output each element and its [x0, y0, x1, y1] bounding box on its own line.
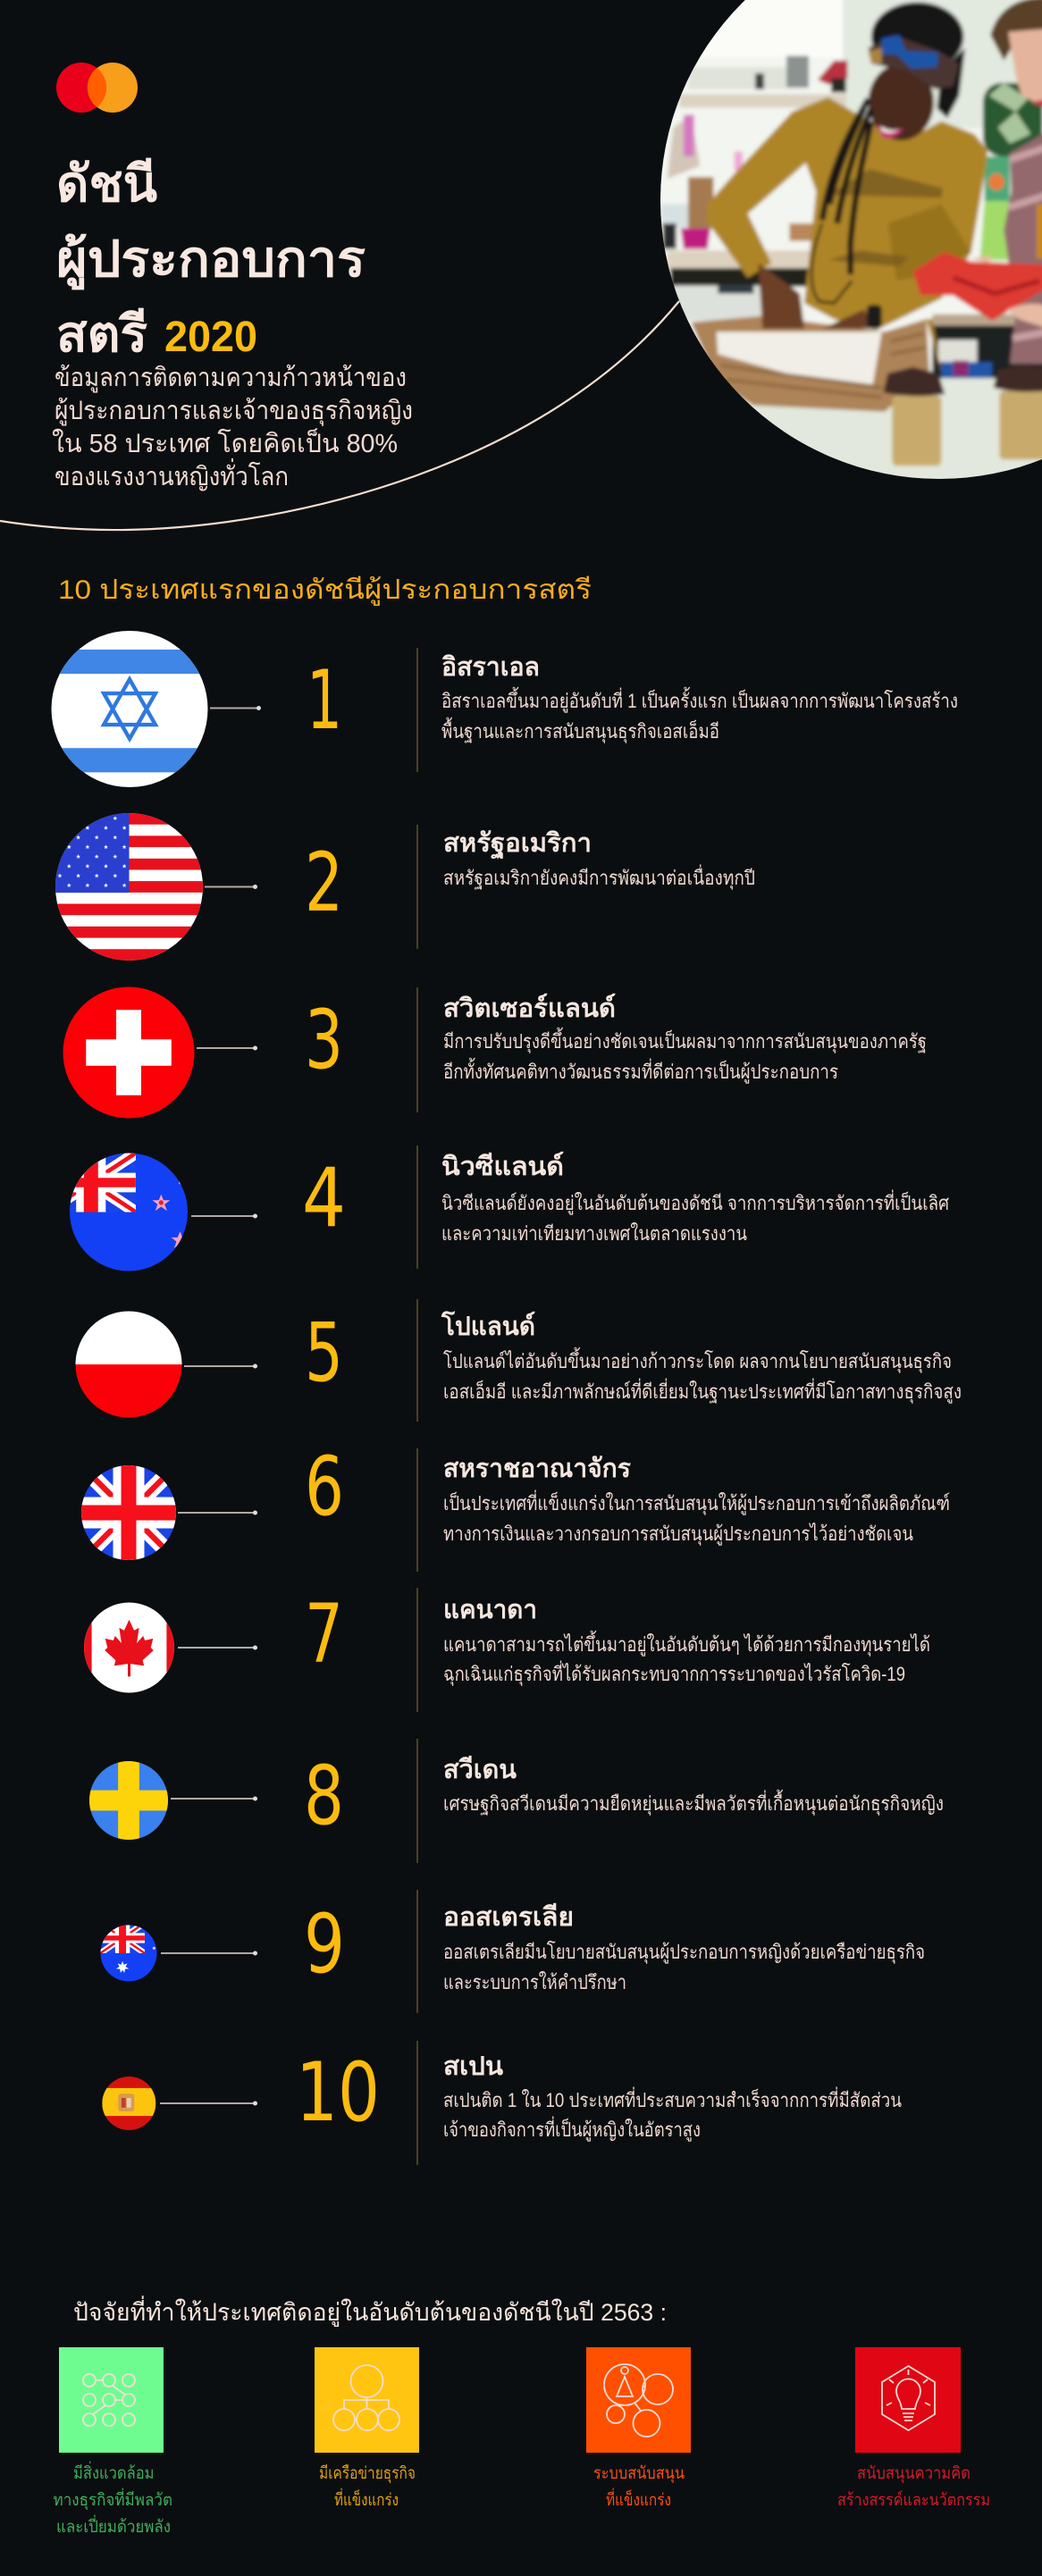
logo: overlapping circles [56, 63, 138, 113]
flag: Canada [84, 1603, 174, 1692]
flag: United Kingdom [81, 1465, 176, 1560]
description [443, 1347, 962, 1404]
flag: Israel [52, 631, 207, 787]
title [56, 155, 366, 362]
flag: United States [55, 813, 203, 961]
caption: ทางธุรกิจที่มีพลวัต [54, 2488, 172, 2511]
caption: มีสิ่งแวดล้อม [73, 2461, 154, 2483]
title: 2020 [164, 314, 257, 361]
connector [171, 1796, 257, 1801]
photo: women packing a box [660, 0, 1042, 479]
description: แคนาดาสามารถไต่ขึ้นมาอยู่ในอันดับต้นๆ ได้ด้วยการมีกองทุนรายได้ [443, 1631, 930, 1657]
icon: green network grid [59, 2347, 164, 2453]
rank number 5: 5 [305, 1306, 343, 1400]
description: ออสเตรเลียมีนโยบายสนับสนุนผู้ประกอบการหญิงด้วยเครือข่ายธุรกิจ [443, 1941, 925, 1964]
description [441, 1189, 949, 1245]
factor 2 [315, 2347, 419, 2510]
rank number 6: 6 [305, 1440, 344, 1534]
description: ทางการเงินและวางกรอบการสนับสนุนผู้ประกอบการไว้อย่างชัดเจน [443, 1523, 913, 1546]
row 4: New Zealand [46, 1145, 949, 1271]
connector [184, 1364, 257, 1369]
icon: yellow hierarchy [315, 2347, 419, 2453]
rank number 3: 3 [305, 994, 343, 1087]
description [443, 1028, 927, 1084]
description: ฉุกเฉินแก่ธุรกิจที่ได้รับผลกระทบจากการระบาดของไวรัสโควิด-19 [443, 1660, 905, 1686]
flag: Poland [75, 1312, 182, 1417]
caption: มีเครือข่ายธุรกิจ [319, 2463, 416, 2484]
country name: สวีเดน [443, 1756, 517, 1784]
country name: สเปน [443, 2052, 503, 2081]
icon: red light bulb [855, 2347, 961, 2453]
title: ผู้ประกอบการ [56, 231, 366, 290]
rank number 9: 9 [304, 1898, 345, 1992]
description: นิวซีแลนด์ยังคงอยู่ในอันดับต้นของดัชนี จากการบริหารจัดการที่เป็นเลิศ [441, 1189, 949, 1215]
description: อิสราเอลขึ้นมาอยู่อันดับที่ 1 เป็นครั้งแรก เป็นผลจากการพัฒนาโครงสร้าง [441, 687, 958, 713]
factor 4 [837, 2347, 990, 2510]
country name: ออสเตรเลีย [443, 1903, 574, 1932]
factor 3 [586, 2347, 691, 2510]
description: สเปนติด 1 ใน 10 ประเทศที่ประสบความสำเร็จจากการที่มีสัดส่วน [443, 2086, 902, 2111]
subtitle text block: ใน 58 ประเทศ โดยคิดเป็น 80% [52, 427, 398, 458]
title: สตรี [56, 306, 147, 362]
icon: orange support network [586, 2347, 691, 2453]
country name: อิสราเอล [441, 653, 540, 682]
caption: ระบบสนับสนุน [593, 2464, 685, 2484]
caption: และเปี่ยมด้วยพลัง [56, 2514, 171, 2537]
connector [197, 1045, 257, 1051]
connector [191, 1213, 257, 1219]
rank number 2: 2 [305, 836, 343, 930]
subtitle text block [52, 364, 413, 491]
row 6: United Kingdom [81, 1440, 950, 1572]
caption: ที่แข็งแกร่ง [334, 2488, 399, 2510]
flag: Australia [100, 1923, 157, 1982]
flag: Switzerland [63, 986, 195, 1119]
row 7: Canada [84, 1588, 930, 1712]
caption [54, 2461, 172, 2537]
description: เจ้าของกิจการที่เป็นผู้หญิงในอัตราสูง [443, 2116, 701, 2142]
row 8: Sweden [89, 1739, 944, 1863]
subtitle text block: ผู้ประกอบการและเจ้าของธุรกิจหญิง [55, 397, 413, 426]
country name: โปแลนด์ [441, 1310, 535, 1341]
flag: Spain [102, 2077, 155, 2130]
description: โปแลนด์ไต่อันดับขึ้นมาอย่างก้าวกระโดด ผลจากนโยบายสนับสนุนธุรกิจ [443, 1347, 952, 1373]
description: พื้นฐานและการสนับสนุนธุรกิจเอสเอ็มอี [441, 717, 719, 743]
caption: สร้างสรรค์และนวัตกรรม [837, 2490, 990, 2510]
description [443, 1941, 925, 1993]
row 2: United States [55, 813, 755, 961]
subtitle text block: ของแรงงานหญิงทั่วโลก [55, 458, 289, 491]
row 3: Switzerland [63, 986, 927, 1119]
flag: New Zealand [70, 1153, 188, 1271]
description: มีการปรับปรุงดีขึ้นอย่างชัดเจนเป็นผลมาจากการสนับสนุนของภาครัฐ [443, 1028, 927, 1053]
description: และระบบการให้คำปรึกษา [443, 1971, 626, 1993]
section heading: top 10: 10 ประเทศแรกของดัชนีผู้ประกอบการสตรี [58, 575, 592, 606]
caption [319, 2463, 416, 2510]
rank number 1: 1 [307, 654, 342, 748]
rank number 8: 8 [304, 1749, 344, 1843]
description [443, 1631, 930, 1686]
row 9: Australia [100, 1890, 925, 2013]
rank number 7: 7 [305, 1588, 343, 1682]
connector [160, 2102, 257, 2105]
section heading: factors: ปัจจัยที่ทำให้ประเทศติดอยู่ในอันดับต้นของดัชนีในปี 2563 : [73, 2295, 667, 2327]
row 5: Poland [75, 1299, 962, 1422]
description [441, 687, 958, 743]
country name: สหราชอาณาจักร [443, 1455, 631, 1483]
row 1: Israel [52, 631, 958, 787]
title: ดัชนี [56, 155, 157, 212]
caption: สนับสนุนความคิด [857, 2464, 971, 2484]
description [443, 1489, 950, 1546]
connector [205, 885, 257, 889]
curved line [0, 301, 679, 530]
country name: แคนาดา [443, 1596, 537, 1624]
factor 1 [54, 2347, 172, 2537]
description: สหรัฐอเมริกายังคงมีการพัฒนาต่อเนื่องทุกปี [443, 864, 755, 890]
rank number 4: 4 [302, 1152, 346, 1246]
caption: ที่แข็งแกร่ง [606, 2488, 671, 2510]
country name: สวิตเซอร์แลนด์ [443, 993, 616, 1023]
connector [178, 1510, 257, 1515]
flag: Sweden [89, 1761, 168, 1840]
description [443, 2086, 902, 2142]
connector [161, 1951, 257, 1955]
row 10: Spain [102, 2041, 902, 2165]
subtitle text block: ข้อมูลการติดตามความก้าวหน้าของ [55, 364, 407, 393]
connector [210, 706, 261, 710]
country name: สหรัฐอเมริกา [443, 829, 592, 860]
description: เศรษฐกิจสวีเดนมีความยืดหยุ่นและมีพลวัตรที่เกื้อหนุนต่อนักธุรกิจหญิง [443, 1790, 944, 1816]
rank number 10: 10 [296, 2046, 380, 2140]
description: และความเท่าเทียมทางเพศในตลาดแรงงาน [441, 1222, 747, 1245]
country name: นิวซีแลนด์ [441, 1151, 564, 1181]
caption [593, 2464, 685, 2510]
caption [837, 2464, 990, 2510]
description: เป็นประเทศที่แข็งแกร่งในการสนับสนุนให้ผู้ประกอบการเข้าถึงผลิตภัณฑ์ [443, 1489, 950, 1515]
description: อีกทั้งทัศนคติทางวัฒนธรรมที่ดีต่อการเป็นผู้ประกอบการ [443, 1058, 838, 1084]
connector [178, 1646, 257, 1649]
description: เอสเอ็มอี และมีภาพลักษณ์ที่ดีเยี่ยมในฐานะประเทศที่มีโอกาสทางธุรกิจสูง [443, 1378, 962, 1404]
